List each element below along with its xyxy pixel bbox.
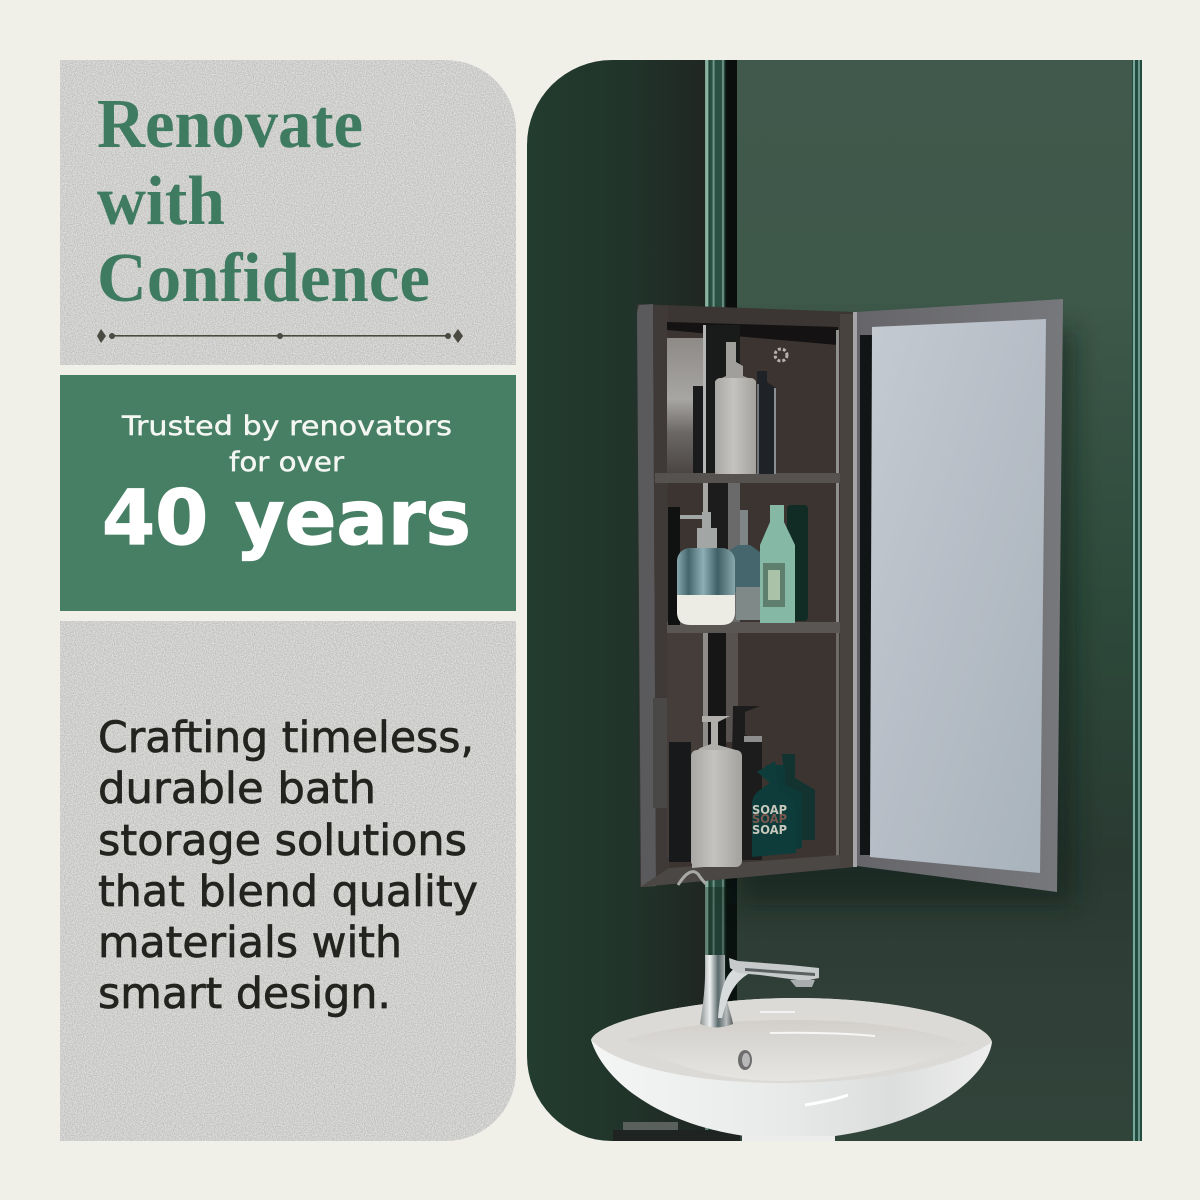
trust text line 2: for over <box>229 447 345 478</box>
faucet spout <box>729 958 819 981</box>
pedestal <box>742 1136 835 1141</box>
soap labels <box>752 805 787 834</box>
sink <box>591 998 992 1141</box>
panel: trust banner <box>60 375 516 611</box>
description text: materials with <box>98 918 402 968</box>
dark shelf under sink <box>613 1122 740 1141</box>
bottles: middle shelf <box>668 505 808 625</box>
faucet body curve <box>718 970 748 1018</box>
cabinet floor lip <box>640 855 854 887</box>
40 years stat: 40 years <box>102 473 471 562</box>
cabinet body <box>637 304 854 887</box>
shelf: middle <box>667 622 842 633</box>
bottles: top shelf <box>715 342 776 474</box>
description text <box>98 713 478 1019</box>
center post <box>840 314 853 867</box>
medicine cabinet <box>637 299 1063 892</box>
title: with <box>97 163 225 240</box>
left frame edge <box>637 304 656 887</box>
faucet <box>700 955 819 1028</box>
bottles: bottom shelf <box>691 706 815 868</box>
panel: product photo <box>527 60 1142 1141</box>
overflow drain <box>738 1050 752 1070</box>
panel: heading <box>60 60 516 365</box>
description text: storage solutions <box>98 816 467 866</box>
description text: smart design. <box>98 969 391 1019</box>
ornamental divider <box>97 329 463 343</box>
trust text: Trusted by renovators <box>121 411 452 442</box>
mirror door <box>857 299 1063 892</box>
panel: description <box>60 621 516 1141</box>
soap labels: SOAP <box>752 803 787 817</box>
basin outer <box>591 998 992 1136</box>
shelf: top <box>655 473 842 483</box>
description text: durable bath <box>98 764 376 814</box>
title: Confidence <box>97 240 430 317</box>
soap labels: SOAP <box>752 823 787 837</box>
description text: that blend quality <box>98 867 478 917</box>
title: Renovate <box>97 86 363 163</box>
soap labels: SOAP <box>752 812 787 826</box>
interior back panel <box>667 322 840 868</box>
basin rim and inner <box>591 998 992 1083</box>
description text: Crafting timeless, <box>98 713 474 763</box>
faucet stem <box>700 955 733 1028</box>
pump dispenser <box>680 512 717 550</box>
title <box>97 86 430 317</box>
cabinet shadow <box>737 330 1075 905</box>
